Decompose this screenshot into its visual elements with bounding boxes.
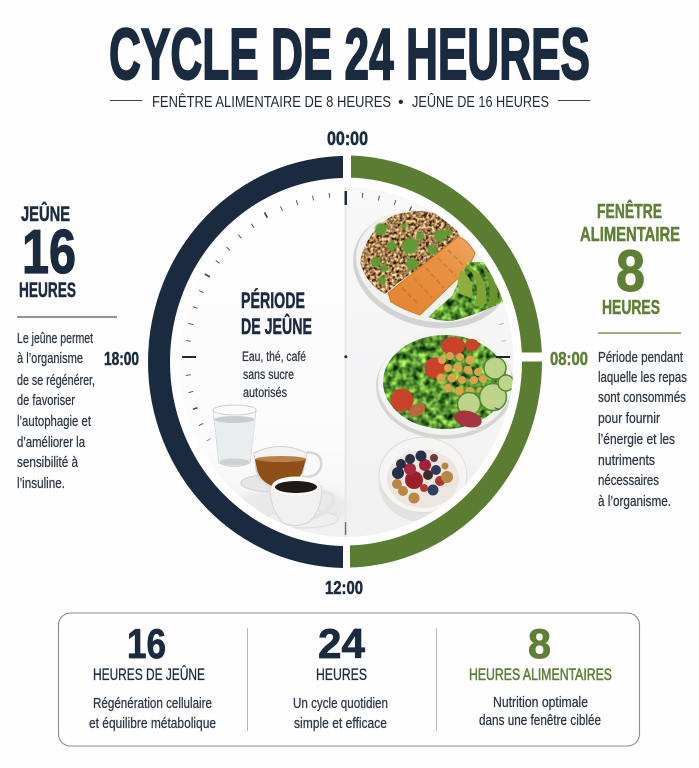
lettuce	[383, 335, 507, 429]
nuts	[392, 462, 453, 504]
hour label 12:00: 12:00	[325, 577, 363, 598]
description	[17, 331, 95, 492]
description: à l’organisme	[17, 351, 83, 367]
cup of coffee	[266, 476, 338, 528]
hour marker 6h	[496, 356, 510, 358]
greens	[428, 262, 506, 321]
chickpeas	[436, 352, 487, 396]
subtitle	[110, 92, 590, 111]
photo: drinks	[213, 405, 348, 528]
description: Le jeûne permet	[17, 331, 93, 347]
subtitle: JEÛNE DE 16 HEURES	[412, 92, 549, 111]
summary column: 16 hours of fasting: 16	[127, 620, 166, 667]
salad bowl	[376, 331, 514, 439]
big number 16: 16	[22, 218, 76, 287]
quinoa salad	[360, 211, 460, 294]
left panel: fasting	[17, 202, 117, 492]
summary column: 8 eating hours	[469, 620, 612, 729]
hour marker 12h	[345, 522, 346, 535]
tick marks over the food	[410, 206, 499, 409]
salmon fillet	[388, 237, 475, 315]
berries	[392, 450, 445, 496]
cup of tea	[241, 446, 321, 492]
hour label 08:00: 08:00	[550, 348, 588, 369]
summary column: 16 hours of fasting	[89, 620, 216, 732]
eating ring	[350, 156, 542, 568]
summary column: 24 hours: HEURES	[316, 666, 367, 684]
description: d’améliorer la	[17, 435, 86, 451]
salmon plate	[353, 210, 504, 328]
avocado slices	[458, 262, 498, 307]
summary column: 8 eating hours: 8	[528, 620, 551, 667]
big number 8: 8	[616, 239, 645, 304]
summary column: 24 hours	[293, 620, 388, 732]
summary column: 24 hours: Un cycle quotidien	[293, 696, 388, 712]
hour marker 18h	[182, 356, 196, 358]
fasting ring	[148, 156, 343, 568]
glass of water	[213, 405, 256, 466]
hour label 18:00: 18:00	[104, 348, 139, 369]
description: pour fournir	[598, 411, 660, 427]
hour label 00:00: 00:00	[327, 129, 368, 150]
photo: meals	[353, 206, 513, 522]
dial face and photo backdrop	[235, 187, 514, 537]
summary column: 8 eating hours: dans une fenêtre ciblée	[479, 713, 601, 729]
summary column: 24 hours: 24	[318, 620, 366, 667]
description: l’insuline.	[17, 476, 65, 492]
description: à l’organisme.	[598, 494, 671, 510]
summary column: 24 hours: simple et efficace	[294, 716, 387, 732]
center text: fasting period: sans sucre	[243, 367, 294, 382]
roasted vegetable	[408, 403, 426, 417]
coffee saucer and shadow	[242, 492, 344, 516]
description: de favoriser	[17, 393, 75, 409]
unit: HEURES	[602, 297, 660, 319]
summary column: 16 hours of fasting: Régénération cellulaire	[93, 696, 212, 712]
yogurt bowl	[379, 438, 467, 522]
heading: JEÛNE	[21, 202, 70, 226]
center text: fasting period: PÉRIODE	[241, 288, 305, 313]
summary panel	[58, 613, 640, 746]
heading	[580, 199, 680, 246]
unit: HEURES	[19, 279, 76, 302]
center text: fasting period: autorisés	[243, 385, 287, 400]
clock ticks	[186, 193, 506, 441]
hour marker 0h	[344, 191, 347, 205]
center text: fasting period: DE JEÛNE	[241, 314, 312, 339]
heading: FENÊTRE	[597, 199, 662, 223]
summary column: 16 hours of fasting: et équilibre métabolique	[89, 716, 216, 732]
subtitle: •	[398, 94, 404, 111]
cucumbers	[458, 357, 514, 416]
center text: fasting period	[241, 288, 312, 400]
description: nécessaires	[598, 473, 659, 489]
red onion	[454, 410, 482, 428]
clock: 24-hour dial	[148, 155, 544, 568]
description: de se régénérer,	[17, 373, 95, 389]
summary column: 16 hours of fasting: HEURES DE JEÛNE	[93, 665, 205, 684]
summary column: 8 eating hours: HEURES ALIMENTAIRES	[469, 666, 612, 684]
subtitle: FENÊTRE ALIMENTAIRE DE 8 HEURES	[152, 92, 391, 111]
description: l’énergie et les	[598, 432, 675, 448]
center dot	[344, 355, 347, 358]
description: l’autophagie et	[17, 414, 91, 430]
right panel: eating window	[580, 199, 687, 510]
summary column: 8 eating hours: Nutrition optimale	[493, 695, 588, 711]
center text: fasting period: Eau, thé, café	[242, 349, 306, 364]
description: nutriments	[598, 453, 655, 469]
tomatoes	[390, 337, 479, 412]
description	[598, 350, 687, 510]
description: sensibilité à	[17, 455, 79, 471]
